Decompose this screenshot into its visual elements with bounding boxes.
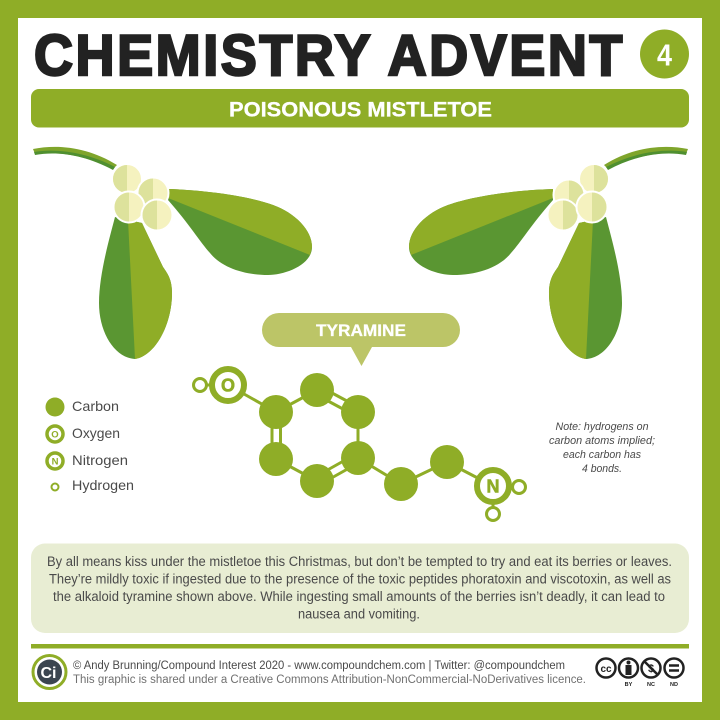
legend: carbon: Carbon [72, 398, 119, 414]
upper leaf [168, 189, 312, 275]
explanation text panel [31, 544, 689, 633]
note: each carbon has [563, 449, 641, 461]
hydroxyl group: O [221, 376, 235, 396]
berries [548, 164, 609, 230]
icon: nc: NC [647, 682, 655, 688]
legend: nitrogen: N [52, 456, 59, 468]
lower leaf [549, 217, 622, 359]
legend: oxygen [47, 425, 120, 442]
icon: by: BY [625, 682, 633, 688]
subtitle banner [31, 89, 689, 128]
subtitle banner: POISONOUS MISTLETOE [229, 98, 492, 122]
berries [112, 164, 172, 230]
icon: nc: $ [648, 663, 654, 675]
carbon atoms [259, 373, 464, 501]
stem [33, 147, 117, 170]
note [549, 421, 655, 475]
credits: © Andy Brunning/Compound Interest 2020 - www.compoundchem.com | Twitter: @compoundchem [73, 660, 565, 672]
legend [46, 398, 134, 493]
tyramine molecule [194, 369, 526, 520]
bonds [200, 385, 519, 514]
note: Note: hydrogens on [556, 421, 648, 433]
legend: oxygen: Oxygen [72, 425, 120, 441]
lower leaf [99, 217, 172, 359]
molecule name callout: TYRAMINE [316, 321, 406, 340]
amine group [477, 470, 526, 520]
compound interest logo [33, 656, 66, 688]
day number badge [640, 30, 689, 78]
amine group: N [486, 476, 500, 496]
compound interest logo: Ci [40, 665, 56, 682]
icon: nc [642, 658, 660, 688]
credits [73, 660, 586, 686]
icon: nd: ND [670, 682, 678, 688]
explanation text panel: By all means kiss under the mistletoe this Christmas, but don’t be tempted to try and eat its berries or leaves. [47, 554, 672, 569]
legend: oxygen: O [51, 430, 59, 440]
hydroxyl group [194, 369, 244, 401]
legend: nitrogen: Nitrogen [72, 452, 128, 468]
creative commons licence icons [596, 658, 684, 688]
legend: hydrogen: Hydrogen [72, 477, 134, 493]
molecule name callout [262, 313, 460, 366]
explanation text panel: They’re mildly toxic if ingested due to the presence of the toxic peptides phoratoxin and viscotoxin, as well as [49, 572, 671, 586]
credits: This graphic is shared under a Creative Commons Attribution-NonCommercial-NoDerivatives licence. [73, 674, 586, 686]
explanation text panel: nausea and vomiting. [298, 606, 420, 622]
note: carbon atoms implied; [549, 435, 655, 447]
legend: nitrogen [47, 452, 128, 469]
upper leaf [409, 189, 553, 275]
mistletoe sprig: right [409, 147, 688, 359]
icon: cc: cc [600, 664, 612, 675]
title: CHEMISTRY ADVENT [34, 22, 622, 87]
explanation text panel: the alkaloid tyramine shown above. While ingesting small amounts of the berries isn’t deadly, it can lead to [53, 589, 665, 604]
day number badge: 4 [657, 38, 673, 72]
stem [604, 147, 688, 170]
note: 4 bonds. [582, 463, 622, 475]
mistletoe sprig: left [33, 147, 312, 359]
